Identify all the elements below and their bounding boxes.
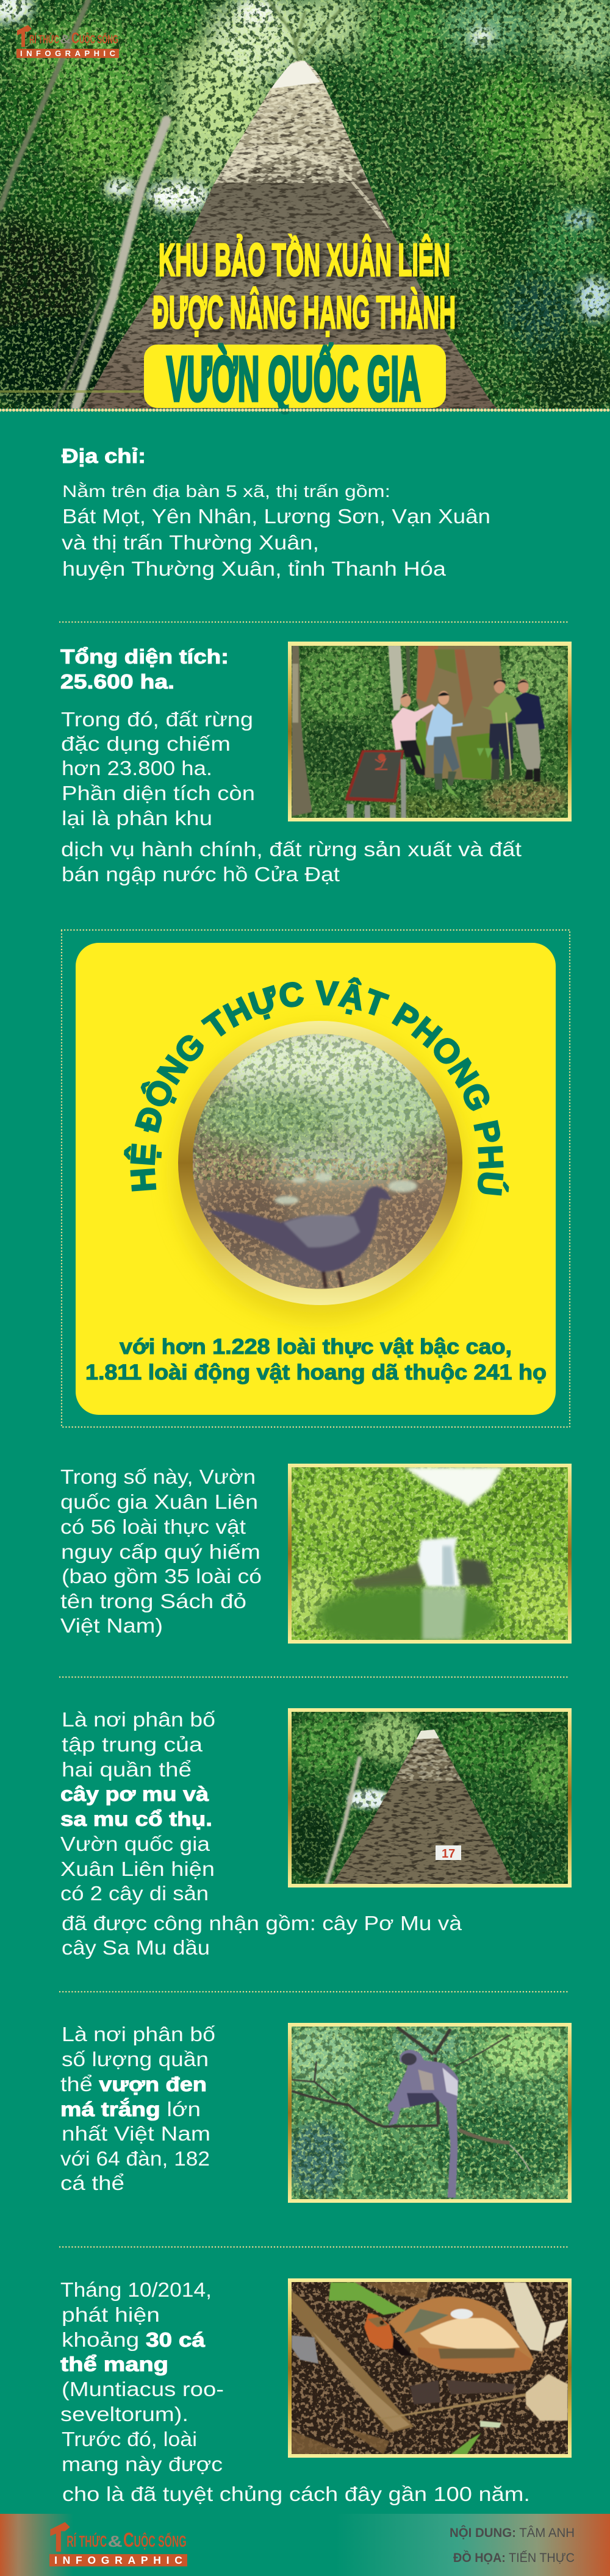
text block: total area: 25.600 ha. [60,670,174,693]
great tree [416,645,502,779]
text block: total area: lại là phân khu [62,807,212,829]
text block: ancient pơ mu and sa mu trees: tập trung của [62,1733,203,1756]
text block: giant muntjac [60,2278,530,2505]
text block: white-cheeked gibbon: với 64 đàn, 182 [60,2147,210,2170]
left trunk [292,645,312,816]
text block: white-cheeked gibbon: nhất Việt Nam [62,2122,210,2145]
footer logo: C [123,2529,134,2552]
text block: ancient pơ mu and sa mu trees: Xuân Liên hiện [60,1858,215,1880]
yellow card [76,943,556,1415]
title [152,234,456,338]
text block: total area: hơn 23.800 ha. [62,757,212,779]
text block: white-cheeked gibbon: số lượng quần [62,2048,209,2070]
text block: address: và thị trấn Thường Xuân, [62,531,319,554]
credits: NỘI DUNG: TÂM ANH [450,2525,575,2540]
text block: endangered plants: tên trong Sách đỏ [60,1590,246,1612]
text block: giant muntjac: thể mang [60,2353,168,2375]
water reflection strip [0,390,143,393]
text block: total area: Phần diện tích còn [62,782,255,804]
text block: endangered plants: (bao gồm 35 loài có [62,1565,262,1587]
footer logo: & [108,2533,123,2550]
text block: giant muntjac: Trước đó, loài [62,2428,197,2450]
text block: ancient pơ mu and sa mu trees: đã được công nhận gồm: cây Pơ Mu và [62,1912,462,1934]
text block: ancient pơ mu and sa mu trees: hai quần thể [62,1758,192,1781]
birch trunks and canopy branches [0,0,342,409]
text block: giant muntjac: mang này được [62,2453,223,2475]
text block: endangered plants: nguy cấp quý hiếm [61,1540,260,1563]
person 3 [481,692,523,724]
text block: ancient pơ mu and sa mu trees: Vườn quốc gia [60,1833,210,1855]
header logo [16,25,119,58]
header logo: C [71,30,79,47]
text block: ancient pơ mu and sa mu trees [60,1708,462,1959]
person 4 [514,692,545,730]
footer logo: UỘC SỐNG [134,2532,187,2550]
text block: ancient pơ mu and sa mu trees: có 2 cây di sản [60,1882,209,1905]
photo: heritage tree: 17 [442,1847,455,1861]
text block: giant muntjac: Tháng 10/2014, [60,2278,212,2301]
credits: ĐỒ HỌA: TIẾN THỰC [453,2550,575,2565]
photo: turtle in leaf litter [288,2278,572,2458]
header logo: & [60,34,71,46]
text block: white-cheeked gibbon: Là nơi phân bố [62,2023,215,2045]
text block: total area: Tổng diện tích: [60,645,229,668]
text block: giant muntjac: khoảng 30 cá [62,2328,206,2351]
text block: giant muntjac: cho là đã tuyệt chủng cách đây gần 100 năm. [62,2483,530,2505]
text block: ancient pơ mu and sa mu trees: cây pơ mu và [60,1783,209,1805]
text block: giant muntjac: (Muntiacus roo- [62,2378,224,2400]
text block: total area: bán ngập nước hồ Cửa Đạt [62,863,340,886]
text block: ancient pơ mu and sa mu trees: Là nơi phân bố [62,1708,215,1731]
ring shadow [174,1028,467,1320]
text block: white-cheeked gibbon: cá thể [60,2172,124,2194]
text block: address: Bát Mọt, Yên Nhân, Lương Sơn, Vạn Xuân [62,505,490,528]
person 1 [392,704,436,750]
text block: address: Địa chỉ: [62,445,146,467]
rocks [351,1561,424,1589]
turtle shell [389,2296,534,2374]
footer logo: RÍ THỨC [66,2532,107,2550]
round photo: grey peacock pheasant [193,1025,458,1290]
caption: 1.811 loài động vật hoang dã thuộc 241 họ [85,1361,547,1384]
text block: total area: dịch vụ hành chính, đất rừng sản xuất và đất [61,838,522,860]
waterfall [418,1537,461,1587]
text block: address: Nằm trên địa bàn 5 xã, thị trấn gồm: [62,482,390,501]
header logo: RÍ THỨC [29,33,59,46]
text block: endangered plants: quốc gia Xuân Liên [60,1490,258,1513]
text block: address: huyện Thường Xuân, tỉnh Thanh Hóa [62,557,447,580]
footer logo: INFOGRAPHIC [54,2554,182,2566]
text block: endangered plants: Trong số này, Vườn [60,1465,256,1488]
text block: ancient pơ mu and sa mu trees: cây Sa Mu dầu [62,1936,210,1959]
panel: rich flora and fauna [61,929,571,1428]
text block: ancient pơ mu and sa mu trees: sa mu cổ thụ. [60,1808,212,1830]
dotted frame [62,930,570,1427]
text block: endangered plants: có 56 loài thực vật [60,1515,246,1538]
text block: total area [60,645,522,886]
caption [85,1335,547,1384]
gold ring [178,1021,462,1305]
photo: waterfall [287,1464,580,1645]
text block: total area: đặc dụng chiếm [61,732,231,755]
monkey [387,2050,459,2198]
text block: white-cheeked gibbon: thể vượn đen [60,2073,207,2095]
footer logo [49,2522,187,2566]
title highlight: Vườn quốc gia [144,344,446,415]
person 2 [426,703,462,745]
tree trunk [73,55,500,409]
credits [450,2525,575,2565]
panel: hero photo of giant tree [0,0,610,415]
caption: với hơn 1.228 loài thực vật bậc cao, [120,1335,512,1359]
text block: giant muntjac: phát hiện [62,2303,160,2326]
text block: address [62,445,490,580]
sky [404,1467,504,1506]
text block: white-cheeked gibbon [60,2023,215,2194]
curved heading: HỆ ĐỘNG THỰC VẬT PHONG PHÚ [124,977,509,1195]
sign board [345,750,404,803]
photo: heritage tree [287,1708,573,1887]
hero bottom scalloped strip [0,409,610,412]
photo: langur in tree [287,2023,572,2203]
pool [316,1587,499,1645]
text block: white-cheeked gibbon: má trắng lớn [60,2098,201,2120]
header logo: UỘC SỐNG [79,33,118,46]
foreground leaves [415,748,497,816]
text block: endangered plants [60,1465,262,1637]
birch [389,645,404,710]
bird [208,1186,392,1289]
text block: total area: Trong đó, đất rừng [61,708,253,731]
footer band [0,2514,610,2576]
text block: endangered plants: Việt Nam) [60,1614,163,1637]
header logo: INFOGRAPHIC [20,49,116,58]
text block: giant muntjac: seveltorum). [60,2403,188,2425]
photo: officials at ancient tree [288,640,573,821]
